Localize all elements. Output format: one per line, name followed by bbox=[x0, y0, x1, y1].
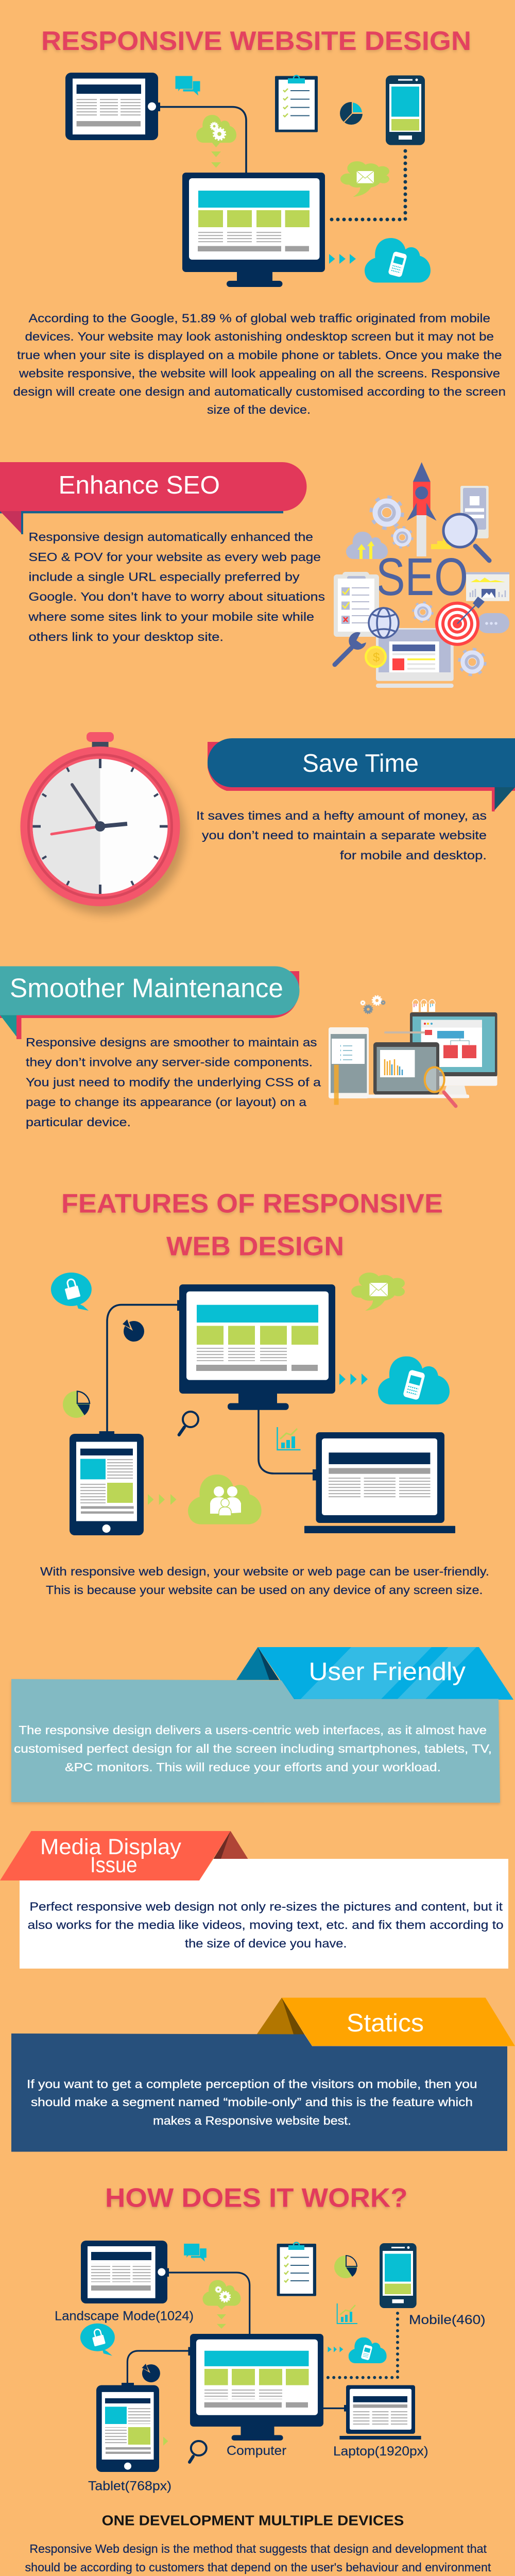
heading: save time: Save Time bbox=[302, 750, 419, 777]
panel: smoother maintenance bbox=[0, 967, 497, 1129]
title: responsive website design: RESPONSIVE WEBSITE DESIGN bbox=[41, 26, 471, 56]
icon: speech bubble bbox=[477, 613, 509, 633]
icon: desktop monitor bbox=[182, 173, 325, 287]
text: save time: you don’t need to maintain a separate website bbox=[202, 828, 487, 842]
heading: statics: Statics bbox=[347, 2009, 424, 2037]
icon: green pie chart bbox=[334, 2256, 357, 2278]
icon: paint brush bbox=[385, 1030, 432, 1035]
text: user friendly: The responsive design delivers a users-centric web interfaces, as it almost have bbox=[19, 1723, 487, 1737]
icon: desktop monitor bbox=[177, 1284, 335, 1410]
arrows bbox=[148, 1494, 176, 1505]
label: computer: Computer bbox=[227, 2444, 286, 2458]
heading: smoother maintenance: Smoother Maintenance bbox=[10, 974, 283, 1004]
text block: intro: devices. Your website may look astonishing ondesktop screen but it may not be bbox=[25, 330, 494, 343]
icon: laptop bbox=[339, 2385, 421, 2439]
heading: user friendly: User Friendly bbox=[309, 1658, 466, 1686]
icon: portrait tablet bbox=[96, 2383, 159, 2472]
text: seo: SEO bbox=[376, 547, 468, 606]
icon: gears bbox=[372, 498, 485, 674]
text: user friendly bbox=[14, 1723, 492, 1774]
text: smoother maintenance: particular device. bbox=[26, 1115, 131, 1129]
icon: phone bbox=[386, 75, 425, 145]
icon: people cloud bbox=[188, 1475, 262, 1524]
text: save time bbox=[196, 809, 487, 862]
icon: profile card bbox=[460, 486, 489, 538]
icon: laptop bbox=[363, 1042, 469, 1098]
icon: coin: $ bbox=[373, 651, 380, 665]
title: how does it work: HOW DOES IT WORK? bbox=[105, 2183, 408, 2213]
dotted line bbox=[330, 151, 405, 219]
text block: intro: true when your site is displayed on a mobile phone or tablets. Once you make the bbox=[17, 348, 502, 362]
icon: pie chart bbox=[340, 102, 363, 125]
label: mobile: Mobile(460) bbox=[409, 2313, 486, 2327]
icon: chat bubbles bbox=[184, 2244, 207, 2262]
icon: lock bubble bbox=[80, 2324, 115, 2355]
text: media display: the size of device you have. bbox=[185, 1937, 347, 1950]
panel: media display issue bbox=[0, 1831, 508, 1969]
icon: rocket bbox=[407, 462, 437, 556]
text: statics: should make a segment named “mobile-only” and this is the feature which bbox=[31, 2095, 473, 2109]
icon: target bbox=[435, 597, 485, 646]
text: statics bbox=[27, 2077, 477, 2127]
label: landscape mode: Landscape Mode(1024) bbox=[55, 2309, 194, 2324]
icon: laptop bbox=[376, 628, 454, 688]
arrows bbox=[328, 2347, 343, 2352]
icon: landscape tablet bbox=[81, 2241, 169, 2303]
icon: gears bbox=[360, 996, 385, 1013]
title: features: WEB DESIGN bbox=[166, 1232, 344, 1262]
icon: magnifier bbox=[443, 514, 489, 561]
card: media display bbox=[20, 1859, 508, 1969]
title: features bbox=[61, 1189, 443, 1262]
label: laptop: Laptop(1920px) bbox=[333, 2444, 428, 2459]
icon: globe bbox=[369, 608, 399, 638]
icon: phone cloud bbox=[365, 238, 431, 282]
arrow bbox=[163, 2437, 168, 2446]
ribbon: smoother maintenance bbox=[0, 967, 300, 1039]
text block: features intro: With responsive web design, your website or web page can be user-friendly. bbox=[40, 1565, 489, 1578]
icon: lock bubble bbox=[51, 1273, 92, 1311]
text: enhance seo: where some sites link to your mobile site while bbox=[28, 610, 314, 623]
heading: media display issue bbox=[40, 1835, 181, 1877]
text: statics: makes a Responsive website best. bbox=[153, 2114, 351, 2127]
heading: media display issue: Media Display bbox=[40, 1835, 181, 1859]
title: features: FEATURES OF RESPONSIVE bbox=[61, 1189, 443, 1219]
text: enhance seo: Responsive design automatically enhanced the bbox=[29, 530, 313, 544]
icon: portrait tablet bbox=[70, 1431, 144, 1535]
text block: intro: According to the Google, 51.89 % of global web traffic originated from mobile bbox=[29, 311, 490, 325]
icon: dark pie chart bbox=[142, 2364, 160, 2382]
icon: coin bbox=[365, 646, 387, 668]
icon: phone cloud bbox=[349, 2337, 387, 2363]
icon: chart bbox=[277, 1427, 301, 1450]
text: enhance seo: SEO & POV for your website as every web page bbox=[29, 550, 321, 564]
illustration: maintenance devices bbox=[329, 996, 497, 1106]
icon: wrench bbox=[335, 632, 366, 665]
icon: tablet bbox=[329, 1027, 369, 1105]
icon: clipboard bbox=[275, 75, 318, 132]
text: user friendly: &PC monitors. This will reduce your efforts and your workload. bbox=[65, 1760, 441, 1774]
icon: magnifier bbox=[190, 2441, 207, 2462]
text: save time: It saves times and a hefty amount of money, as bbox=[196, 809, 487, 822]
illustration: multiple devices bbox=[55, 2241, 486, 2494]
card: user friendly bbox=[11, 1679, 500, 1803]
text: media display: also works for the media like videos, moving text, etc. and fix them according to bbox=[28, 1918, 504, 1931]
text: smoother maintenance bbox=[26, 1036, 321, 1129]
icon: paint cans bbox=[413, 999, 435, 1012]
text: media display: Perfect responsive web design not only re-sizes the pictures and content, but it bbox=[29, 1900, 503, 1913]
icon: phone cloud bbox=[378, 1357, 450, 1404]
panel: statics bbox=[11, 1998, 515, 2151]
heading: one development multiple devices: ONE DEVELOPMENT MULTIPLE DEVICES bbox=[102, 2512, 404, 2529]
icon: magnifier bbox=[179, 1412, 198, 1435]
text block: intro: size of the device. bbox=[207, 403, 311, 416]
icon: stopwatch bbox=[21, 732, 185, 914]
text block: how it works: should be according to customers that depend on the user's behaviour and environment bbox=[25, 2561, 491, 2574]
icon: desktop monitor bbox=[188, 2334, 323, 2441]
illustration: seo bbox=[334, 462, 509, 688]
icon: clipboard bbox=[277, 2242, 316, 2296]
heading: enhance seo: Enhance SEO bbox=[59, 471, 220, 499]
cable bbox=[160, 107, 246, 173]
icon: phone bbox=[380, 2243, 417, 2308]
illustration: devices network bbox=[65, 73, 431, 287]
illustration: features devices bbox=[51, 1273, 455, 1535]
text block: features intro bbox=[40, 1565, 489, 1597]
ribbon: media display bbox=[0, 1831, 248, 1880]
dotted line bbox=[328, 2313, 398, 2378]
text: enhance seo: include a single URL especially preferred by bbox=[29, 570, 300, 583]
text block: features intro: This is because your website can be used on any device of any screen size. bbox=[46, 1583, 483, 1597]
text: enhance seo: others link to your desktop site. bbox=[29, 630, 224, 643]
icon: chat bubbles bbox=[175, 76, 200, 96]
icon: coins bbox=[431, 538, 451, 549]
panel: save time bbox=[21, 732, 515, 914]
text block: intro: design will create one design and automatically customised according to the screen bbox=[13, 385, 506, 398]
icon: monitor bbox=[410, 1012, 497, 1098]
icon: upload cloud bbox=[346, 532, 388, 559]
ribbon: save time bbox=[208, 738, 515, 811]
text: enhance seo bbox=[28, 530, 325, 643]
text: user friendly: customised perfect design for all the screen including smartphones, tablets, TV, bbox=[14, 1742, 492, 1755]
icon: chart bbox=[337, 2303, 357, 2324]
icon: dark pie chart bbox=[123, 1319, 144, 1342]
ribbon: statics bbox=[257, 1998, 515, 2046]
text block: how it works bbox=[25, 2542, 491, 2576]
text block: intro bbox=[13, 311, 506, 416]
ribbon: enhance seo bbox=[0, 462, 307, 534]
text: smoother maintenance: Responsive designs are smoother to maintain as bbox=[26, 1036, 317, 1049]
icon: laptop bbox=[304, 1432, 455, 1533]
arrows bbox=[339, 1374, 368, 1385]
text block: intro: website responsive, the website will look appealing on all the screens. Responsive bbox=[19, 367, 500, 380]
text: save time: for mobile and desktop. bbox=[340, 849, 487, 862]
icon: mail cloud bbox=[351, 1273, 405, 1311]
icon: chart panel bbox=[466, 572, 509, 601]
panel: user friendly bbox=[11, 1647, 513, 1803]
cables bbox=[127, 2273, 345, 2408]
label: tablet: Tablet(768px) bbox=[88, 2479, 171, 2494]
icon: gear cloud bbox=[196, 115, 236, 168]
arrows bbox=[329, 254, 356, 264]
text: smoother maintenance: they don’t involve any server-side components. bbox=[26, 1056, 313, 1069]
icon: magnifier bbox=[425, 1067, 456, 1106]
text: statics: If you want to get a complete perception of the visitors on mobile, then you bbox=[27, 2077, 477, 2091]
ribbon: user friendly bbox=[236, 1647, 513, 1700]
icon: gear cloud bbox=[203, 2280, 241, 2329]
text: media display bbox=[28, 1900, 504, 1950]
heading: media display issue: Issue bbox=[90, 1853, 138, 1877]
icon: mail cloud bbox=[340, 161, 389, 197]
icon: checklist clipboard bbox=[334, 572, 379, 637]
text: enhance seo: Google. You don’t have to worry about situations bbox=[29, 590, 325, 603]
card: statics bbox=[11, 2033, 507, 2151]
text: smoother maintenance: You just need to modify the underlying CSS of a bbox=[26, 1076, 321, 1089]
text: smoother maintenance: page to change its appearance (or layout) on a bbox=[26, 1095, 306, 1109]
icon: green pie chart bbox=[63, 1391, 90, 1418]
cables bbox=[107, 1305, 313, 1473]
panel: enhance seo bbox=[0, 462, 509, 688]
text block: how it works: Responsive Web design is the method that suggests that design and development that bbox=[29, 2542, 487, 2555]
icon: landscape tablet bbox=[65, 73, 160, 140]
